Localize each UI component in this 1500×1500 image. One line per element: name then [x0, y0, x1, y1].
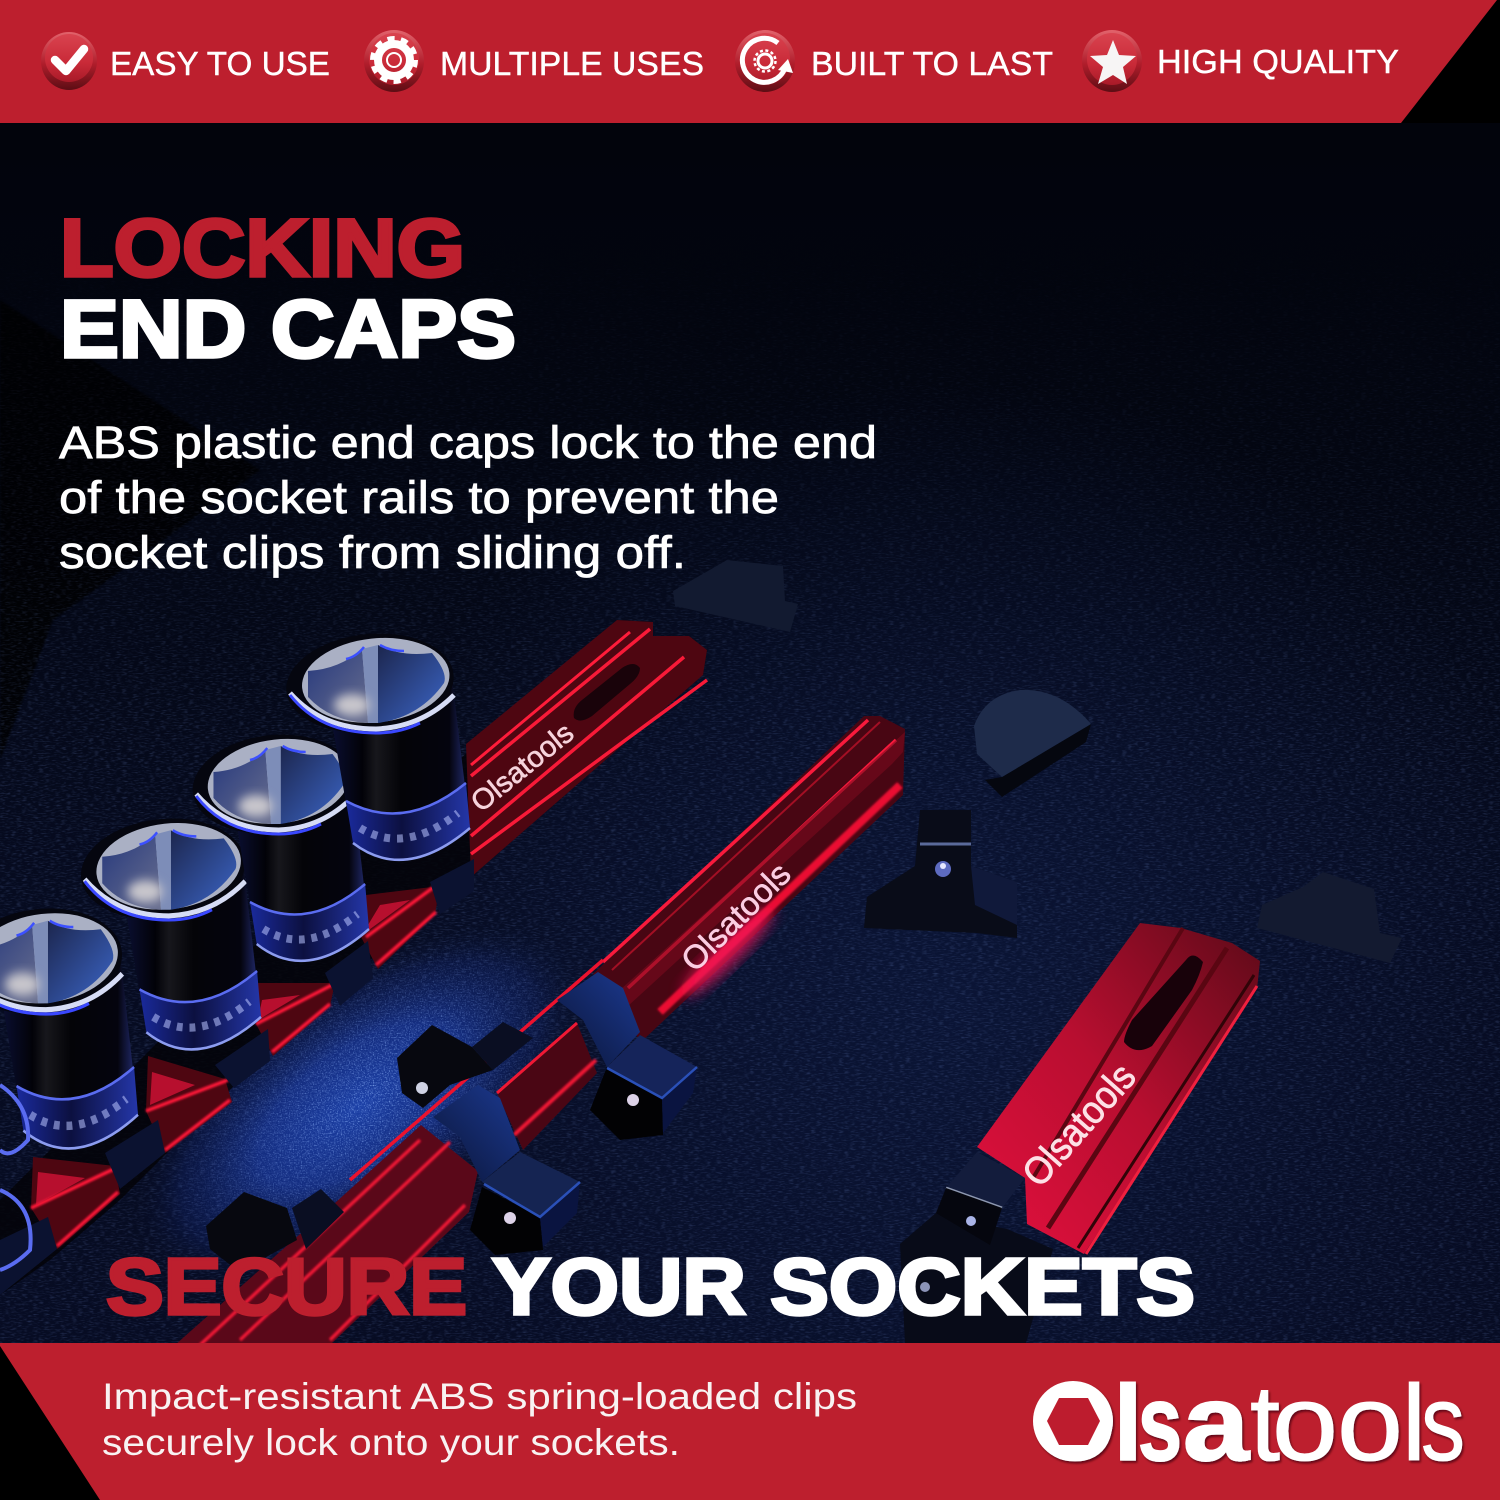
body text: clips description: Impact-resistant ABS spring-loaded clips [102, 1376, 857, 1417]
body text: clips description: securely lock onto your sockets. [102, 1422, 680, 1463]
label: built to last: BUILT TO LAST [811, 45, 1053, 82]
body text: clips description [102, 1376, 857, 1463]
logo on right rail: Olsatools [1014, 1056, 1144, 1195]
logo: Olsatools: O [1033, 1362, 1117, 1483]
heading line: end caps: END CAPS [60, 284, 516, 375]
label: high quality: HIGH QUALITY [1157, 43, 1399, 80]
photo: rail clips [206, 972, 1053, 1343]
bottom banner [0, 1343, 1500, 1500]
body text: end caps description [59, 417, 877, 578]
clip left of center rail [397, 1022, 533, 1108]
rail section near heading [175, 1125, 478, 1345]
clip upper right on center rail [557, 972, 697, 1140]
icon: star badge [1082, 30, 1142, 92]
icon: loose spring clip [864, 810, 1017, 938]
logo on rail one: Olsatools [465, 717, 580, 819]
photo: right rail [977, 923, 1260, 1254]
rail one clips [0, 859, 474, 1295]
logo: Olsatools: t [1250, 1362, 1280, 1483]
icon: dim end cap right [1257, 872, 1402, 963]
body text: end caps description: of the socket rails to prevent the [59, 472, 779, 523]
rail slot [1124, 955, 1203, 1050]
logo: Olsatools: s [1421, 1362, 1465, 1483]
logo: Olsatools: l [1402, 1362, 1426, 1483]
clip bottom of center rail [206, 1189, 344, 1272]
logo: Olsatools: o [1337, 1362, 1403, 1483]
heading: locking end caps [60, 203, 516, 375]
heading line: locking: LOCKING [60, 203, 465, 294]
body text: end caps description: ABS plastic end caps lock to the end [59, 417, 877, 468]
label: easy to use: EASY TO USE [110, 45, 330, 82]
rail section between clips [497, 1023, 597, 1150]
icon: rounded end cap [974, 690, 1091, 797]
heading words: your sockets: YOUR SOCKETS [492, 1242, 1195, 1331]
photo: loose end caps and clip [673, 560, 1402, 963]
label: multiple uses: MULTIPLE USES [440, 45, 704, 82]
icon: gear badge [364, 30, 424, 92]
icon: cycle gear badge [735, 30, 795, 92]
heading word: secure: SECURE [106, 1242, 467, 1331]
top banner [0, 0, 1500, 123]
clip on right rail [900, 1152, 1053, 1343]
icon: dim end cap top [673, 560, 798, 632]
clip lower on center rail [433, 1085, 580, 1255]
photo: socket rail one [0, 620, 707, 1295]
logo: Olsatools: l [1113, 1362, 1143, 1483]
body text: end caps description: socket clips from sliding off. [59, 527, 686, 578]
logo: Olsatools: a [1183, 1362, 1250, 1483]
logo: Olsatools [1033, 1362, 1465, 1483]
logo: Olsatools: o [1272, 1362, 1338, 1483]
rail section with logo [593, 716, 905, 1042]
photo: center rail [175, 716, 905, 1345]
logo: Olsatools: s [1138, 1362, 1182, 1483]
logo on center rail: Olsatools [674, 855, 798, 978]
heading: secure your sockets [106, 1242, 1195, 1331]
icon: check badge [41, 32, 97, 90]
photo: chrome sockets [0, 625, 470, 1270]
rail segments between sockets [31, 884, 440, 1249]
